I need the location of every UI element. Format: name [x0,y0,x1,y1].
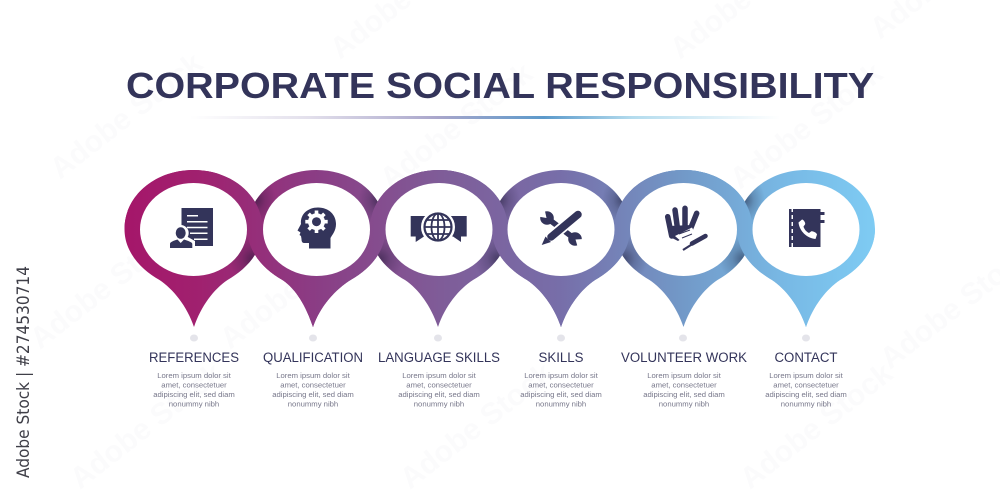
icon: wrench and pencil [538,209,584,248]
text block: skills: Lorem ipsum dolor sit [524,371,599,380]
text block: qualification: adipiscing elit, sed diam [272,390,354,399]
heading: contact: CONTACT [774,350,838,365]
watermark: Adobe Stock [24,216,189,356]
text block: skills [520,371,602,408]
icon: globe with speech bubbles [411,210,467,244]
icon: document and person [166,208,213,250]
pin: references [124,170,262,327]
text block: qualification: Lorem ipsum dolor sit [276,371,351,380]
text block: qualification [272,371,354,408]
stock id side text: Adobe Stock | #274530714 [14,266,34,478]
text block: language skills [398,371,480,408]
pin: qualification [248,170,386,327]
text block: language skills: amet, consectetuer [406,380,472,390]
icon: adult and child hands [668,208,706,250]
text block: references: adipiscing elit, sed diam [153,390,235,399]
pin: contact [737,170,875,327]
text block: references: nonummy nibh [169,400,219,408]
text block: references: amet, consectetuer [161,380,227,390]
text block: references: Lorem ipsum dolor sit [157,371,232,380]
text block: contact: Lorem ipsum dolor sit [769,371,844,380]
title: CORPORATE SOCIAL RESPONSIBILITY [126,65,874,106]
text block: contact: adipiscing elit, sed diam [765,390,847,399]
text block: skills: nonummy nibh [536,400,586,408]
pin: skills [492,170,630,327]
watermark: Adobe Stock [394,356,559,496]
text block: language skills: adipiscing elit, sed diam [398,390,480,399]
watermark: Adobe Stock [734,356,899,496]
icon: head with gear [298,208,336,248]
pin holes [140,183,860,276]
text block: volunteer work: amet, consectetuer [651,380,717,390]
heading: language skills: LANGUAGE SKILLS [378,350,500,365]
pin: volunteer work [614,170,752,327]
heading: skills: SKILLS [538,350,584,365]
text block: volunteer work: nonummy nibh [659,400,709,408]
text block: contact: nonummy nibh [781,400,831,408]
watermark: Adobe Stock [724,56,889,196]
pin: language skills [370,170,508,327]
watermark: Adobe Stock [44,46,209,186]
heading: references: REFERENCES [149,350,239,365]
text block: volunteer work [643,371,725,408]
heading: qualification: QUALIFICATION [263,350,363,365]
watermark: Adobe Stock [64,356,229,496]
watermark: Adobe Stock [374,56,539,196]
text block: qualification: nonummy nibh [288,400,338,408]
pin chain [124,170,875,327]
text block: language skills: nonummy nibh [414,400,464,408]
text block: volunteer work: Lorem ipsum dolor sit [647,371,722,380]
text block: language skills: Lorem ipsum dolor sit [402,371,477,380]
heading: volunteer work: VOLUNTEER WORK [621,350,747,365]
text block: volunteer work: adipiscing elit, sed diam [643,390,725,399]
title divider line [190,116,780,119]
text block: contact: amet, consectetuer [773,380,839,390]
text block: references [153,371,235,408]
text block: contact [765,371,847,408]
text block: qualification: amet, consectetuer [280,380,346,390]
text block: skills: amet, consectetuer [528,380,594,390]
watermark: Adobe Stock [214,216,379,356]
pin base dots [190,334,810,342]
text block: skills: adipiscing elit, sed diam [520,390,602,399]
icon: phone book [789,209,824,247]
